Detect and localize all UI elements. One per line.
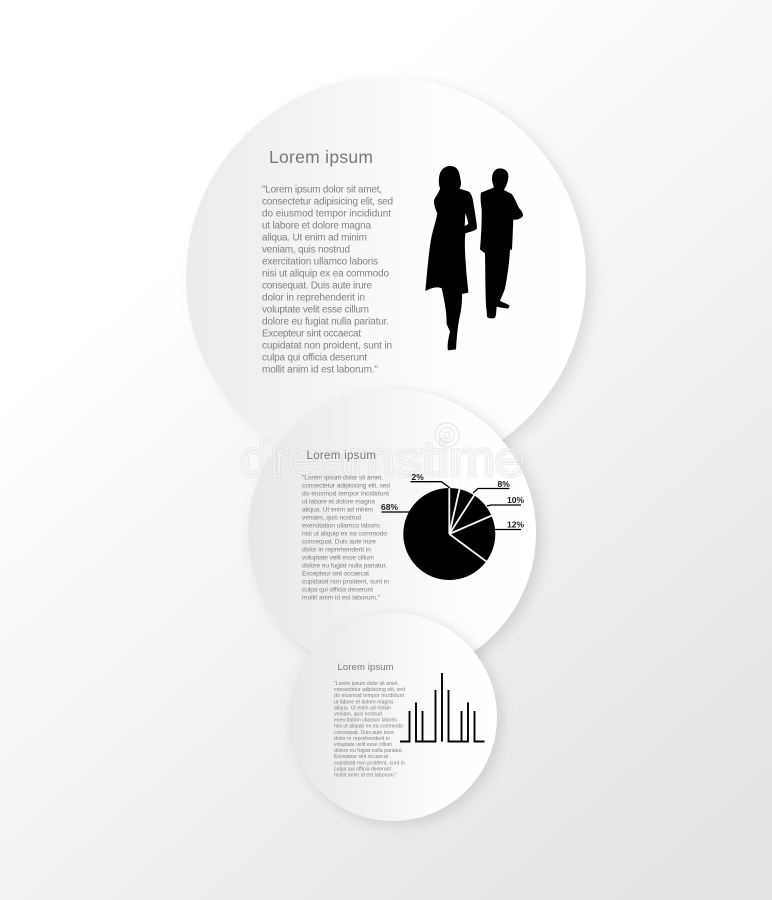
icon: two people silhouettes bbox=[425, 166, 523, 350]
text block: large circle: voluptate velit esse cillum bbox=[262, 304, 369, 316]
panel: large circle bbox=[186, 77, 592, 480]
text block: small circle: exercitation ullamco laboris bbox=[334, 718, 397, 724]
text block: large circle: veniam, quis nostrud bbox=[262, 244, 350, 256]
text block: large circle: consequat. Duis aute irure bbox=[262, 280, 372, 292]
text block: medium circle: aliqua. Ut enim ad minim bbox=[302, 506, 373, 514]
text block: large circle: ut labore et dolore magna bbox=[262, 220, 371, 232]
text block: large circle: exercitation ullamco laboris bbox=[262, 256, 378, 268]
text block: small circle: ut labore et dolore magna bbox=[334, 699, 393, 705]
text block: small circle: veniam, quis nostrud bbox=[334, 712, 382, 718]
text block: large circle: cupidatat non proident, sunt in bbox=[262, 340, 392, 352]
panel: medium circle bbox=[240, 389, 542, 681]
text block: medium circle: Excepteur sint occaecat bbox=[302, 570, 369, 578]
heading: medium circle: Lorem ipsum bbox=[306, 450, 376, 462]
text block: large circle: mollit anim id est laborum." bbox=[262, 364, 378, 376]
watermark: dreamstime bbox=[240, 431, 525, 487]
watermark: dreamstime bbox=[240, 431, 525, 487]
text block: medium circle: cupidatat non proident, sunt in bbox=[302, 578, 389, 586]
text block: small circle: dolor in reprehenderit in bbox=[334, 736, 390, 742]
text block: large circle: Excepteur sint occaecat bbox=[262, 328, 361, 340]
text block: small circle bbox=[334, 681, 405, 778]
text block: large circle: dolor in reprehenderit in bbox=[262, 292, 365, 304]
text block: medium circle: nisi ut aliquip ex ea commodo bbox=[302, 530, 387, 538]
pie labels and leader lines: 68% bbox=[381, 502, 398, 512]
text block: large circle: culpa qui officia deserunt bbox=[262, 352, 367, 364]
pie labels and leader lines: 12% bbox=[507, 520, 524, 530]
text block: medium circle: mollit anim id est laborum." bbox=[302, 594, 381, 602]
text block: large circle: do eiusmod tempor incididunt bbox=[262, 208, 391, 220]
heading: large circle: Lorem ipsum bbox=[269, 147, 373, 167]
text block: medium circle: dolor in reprehenderit in bbox=[302, 546, 371, 554]
text block: medium circle: dolore eu fugiat nulla pariatur. bbox=[302, 562, 387, 570]
text block: medium circle bbox=[302, 474, 390, 602]
text block: medium circle: voluptate velit esse cillum bbox=[302, 554, 374, 562]
text block: medium circle: do eiusmod tempor incididunt bbox=[302, 490, 389, 498]
text block: medium circle: consequat. Duis aute irure bbox=[302, 538, 376, 546]
text block: small circle: cupidatat non proident, sunt in bbox=[334, 760, 405, 766]
text block: large circle: aliqua. Ut enim ad minim bbox=[262, 232, 367, 244]
text block: medium circle: "Lorem ipsum dolor sit amet, bbox=[302, 474, 383, 482]
text block: large circle: "Lorem ipsum dolor sit amet, bbox=[262, 184, 382, 196]
text block: small circle: consequat. Duis aute irure bbox=[334, 730, 394, 736]
pie labels and leader lines: 10% bbox=[507, 495, 524, 505]
text block: small circle: nisi ut aliquip ex ea commodo bbox=[334, 724, 403, 730]
text block: small circle: "Lorem ipsum dolor sit amet, bbox=[334, 681, 399, 687]
text block: small circle: mollit anim id est laborum." bbox=[334, 772, 397, 778]
text block: large circle: consectetur adipisicing elit, sed bbox=[262, 196, 393, 208]
text block: medium circle: ut labore et dolore magna bbox=[302, 498, 375, 506]
text block: large circle: dolore eu fugiat nulla pariatur. bbox=[262, 316, 389, 328]
text block: small circle: culpa qui officia deserunt bbox=[334, 766, 392, 772]
text block: small circle: do eiusmod tempor incididunt bbox=[334, 693, 405, 699]
text block: medium circle: culpa qui officia deserunt bbox=[302, 586, 373, 594]
text block: small circle: dolore eu fugiat nulla pariatur. bbox=[334, 748, 403, 754]
text block: medium circle: veniam, quis nostrud bbox=[302, 514, 361, 522]
panel: small circle bbox=[289, 613, 502, 825]
text block: medium circle: exercitation ullamco laboris bbox=[302, 522, 381, 530]
pie labels and leader lines bbox=[381, 472, 524, 530]
text block: small circle: Excepteur sint occaecat bbox=[334, 754, 389, 760]
text block: small circle: voluptate velit esse cillum bbox=[334, 742, 392, 748]
heading: small circle: Lorem ipsum bbox=[338, 662, 394, 673]
text block: small circle: aliqua. Ut enim ad minim bbox=[334, 705, 391, 711]
pie labels and leader lines: 8% bbox=[498, 479, 510, 489]
text block: medium circle: consectetur adipisicing elit, sed bbox=[302, 482, 390, 490]
bar chart bbox=[400, 673, 484, 742]
text block: large circle bbox=[262, 184, 393, 376]
pie chart bbox=[381, 472, 524, 580]
text block: small circle: consectetur adipisicing elit, sed bbox=[334, 687, 405, 693]
pie labels and leader lines: 2% bbox=[412, 472, 424, 482]
text block: large circle: nisi ut aliquip ex ea commodo bbox=[262, 268, 389, 280]
